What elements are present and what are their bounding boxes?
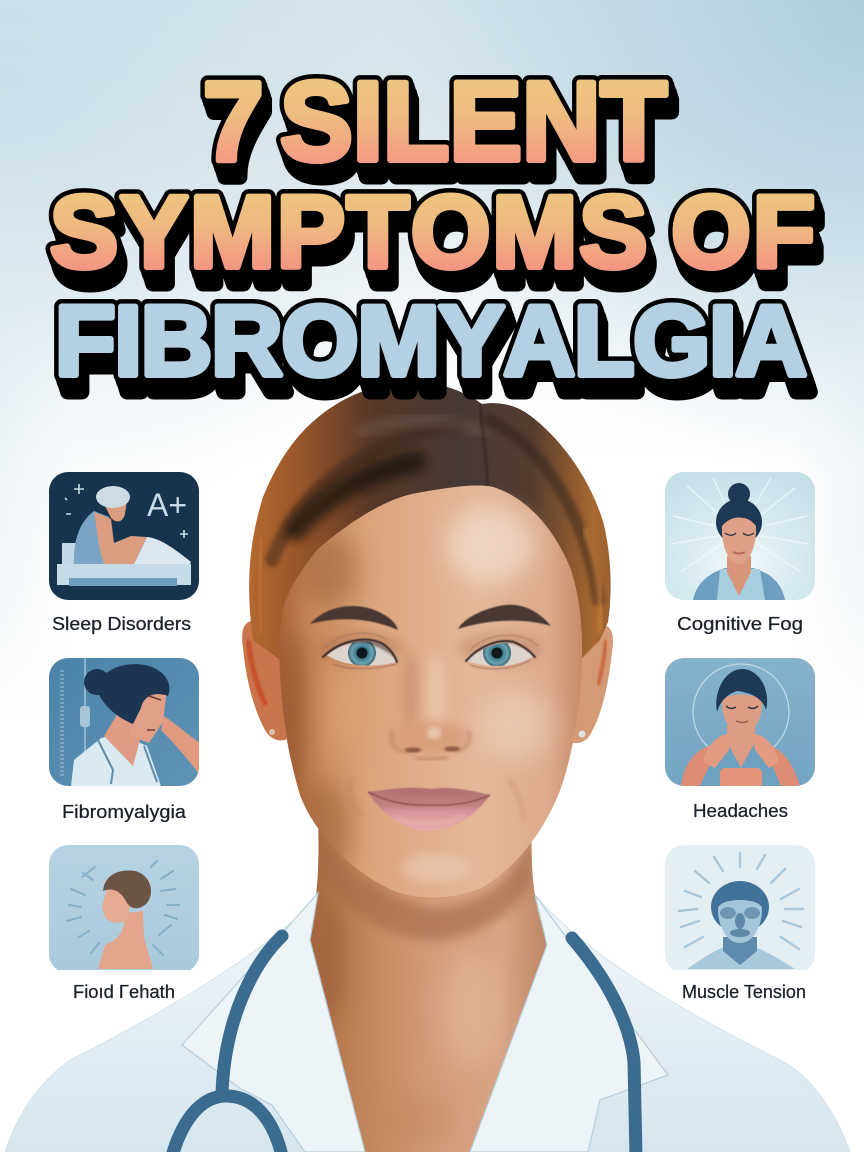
lips	[368, 788, 490, 831]
right eye	[465, 635, 538, 669]
title line 3: FIBROMYALGIA	[55, 285, 807, 396]
left ear	[242, 621, 290, 740]
label: third left item: Fioıd Γehath	[73, 982, 175, 1002]
label: cognitive fog: Cognitive Fog	[677, 614, 803, 634]
symptom: headaches	[665, 658, 815, 821]
earrings	[269, 729, 586, 738]
icon: man with tension marks	[665, 845, 815, 970]
label: headaches: Headaches	[693, 801, 788, 821]
icon: person in bed: A+	[147, 487, 187, 523]
icon: nurse holding head	[49, 658, 199, 787]
title line 1: 7 SILENT	[203, 59, 667, 184]
face	[279, 486, 582, 897]
doctor portrait	[5, 382, 850, 1152]
neck	[304, 820, 549, 1152]
left collar	[182, 893, 365, 1152]
title line 2: SYMPTOMS OF	[50, 175, 815, 289]
hair strands	[259, 406, 601, 630]
title line 2: SYMPTOMS OF	[50, 175, 815, 289]
right collar	[470, 895, 668, 1152]
icon: woman in profile	[49, 845, 199, 970]
stethoscope	[172, 936, 636, 1152]
eyebrows	[310, 606, 398, 630]
label: fibromyalgia: Fibromyalygia	[62, 802, 187, 822]
label: muscle tension: Muscle Tension	[682, 982, 806, 1002]
neck shading	[314, 830, 532, 1144]
label: sleep disorders: Sleep Disorders	[52, 614, 191, 634]
nose	[391, 721, 470, 760]
left eye	[322, 633, 398, 669]
icon: woman holding neck	[665, 658, 815, 790]
icon: person in bed	[49, 472, 199, 600]
symptom: fibromyalgia	[49, 658, 199, 822]
white coat	[5, 895, 850, 1152]
title line 1: 7 SILENT	[203, 59, 667, 184]
background gradient	[0, 0, 864, 628]
icon: woman with radiating light	[665, 472, 815, 600]
hair	[249, 382, 611, 660]
right ear	[568, 625, 613, 743]
title line 3: FIBROMYALGIA	[55, 285, 807, 396]
symptom: third left item	[49, 845, 199, 1002]
face shading	[276, 507, 551, 883]
title	[50, 59, 815, 396]
symptom: muscle tension	[665, 845, 815, 1002]
symptom: cognitive fog	[665, 472, 815, 634]
symptom: sleep disorders	[49, 472, 199, 634]
